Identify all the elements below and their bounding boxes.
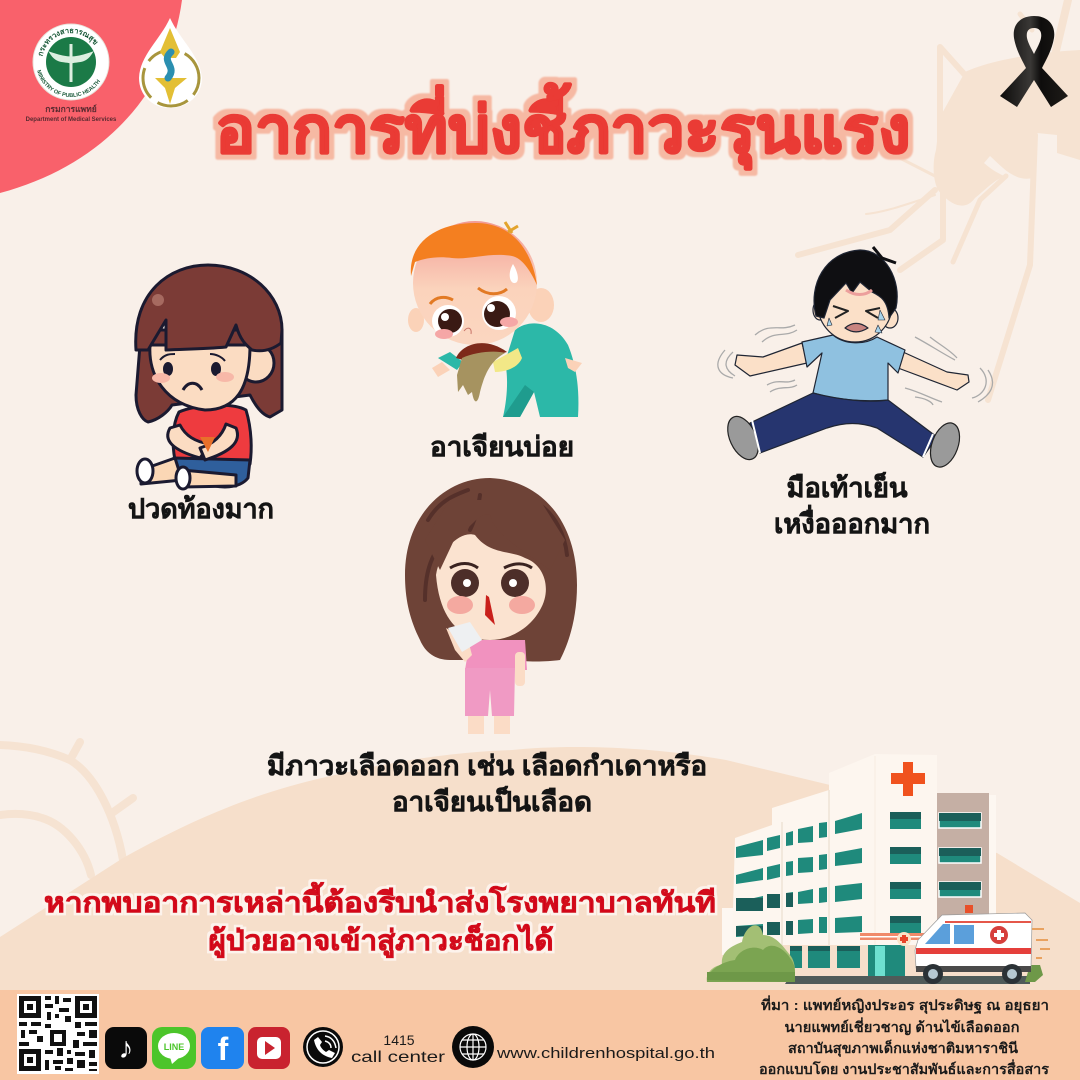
illustration: vomiting baby <box>408 221 582 417</box>
logo: child health institute <box>139 18 202 108</box>
label: bleeding symptoms: อาเจียนเป็นเลือด <box>392 784 592 817</box>
illustration: shaking boy <box>718 247 993 471</box>
illustration: woman with nosebleed <box>405 478 577 734</box>
title: อาการที่บ่งชี้ภาวะรุนแรง <box>216 83 910 170</box>
warning message: ผู้ป่วยอาจเข้าสู่ภาวะช็อกได้ <box>208 923 554 958</box>
source credits: ออกแบบโดย งานประชาสัมพันธ์และการสื่อสาร <box>759 1059 1049 1077</box>
top left red corner <box>0 0 182 193</box>
icon: phone <box>303 1027 343 1067</box>
black ribbon <box>1000 16 1068 107</box>
label: cold hands and feet, heavy sweating: เหงื่อออกมาก <box>774 504 930 539</box>
icon: youtube <box>248 1027 290 1069</box>
label: cold hands and feet, heavy sweating: มือเท้าเย็น <box>786 470 908 503</box>
logo: ministry of public health: กระทรวงสาธารณสุข <box>38 28 98 56</box>
footer bar <box>0 990 1080 1080</box>
label: cold hands and feet, heavy sweating <box>774 470 930 539</box>
source credits <box>759 995 1049 1077</box>
logo: ministry of public health <box>26 24 117 123</box>
warning message: หากพบอาการเหล่านี้ต้องรีบนำส่งโรงพยาบาลทันที <box>44 881 716 918</box>
icon: facebook <box>201 1027 244 1069</box>
logo: ministry of public health: Department of Medical Services <box>26 117 117 123</box>
icon: facebook: f <box>218 1031 229 1067</box>
illustration: girl with stomach ache <box>136 265 282 489</box>
mosquito silhouette top right <box>798 0 1080 400</box>
call center text: call center <box>351 1049 446 1066</box>
source credits: สถาบันสุขภาพเด็กแห่งชาติมหาราชินี <box>788 1039 1018 1057</box>
source credits: ที่มา : แพทย์หญิงประอร สุประดิษฐ ณ อยุธยา <box>761 995 1049 1015</box>
icon: line <box>152 1027 196 1069</box>
label: bleeding symptoms: มีภาวะเลือดออก เช่น เลือดกำเดาหรือ <box>267 751 707 781</box>
call center text: 1415 <box>383 1032 415 1048</box>
mosquito silhouette bottom left <box>0 742 133 875</box>
icon: tiktok: ♪ <box>118 1032 134 1065</box>
icon: globe <box>452 1026 494 1068</box>
source credits: นายแพทย์เชี่ยวชาญ ด้านไข้เลือดออก <box>784 1017 1020 1036</box>
call center text <box>351 1032 446 1066</box>
website url: www.childrenhospital.go.th <box>496 1045 715 1062</box>
label: frequent vomiting: อาเจียนบ่อย <box>430 432 574 462</box>
illustration: hospital and ambulance <box>707 754 1050 984</box>
logo: ministry of public health: MINISTRY OF PUBLIC HEALTH <box>37 70 100 97</box>
warning message <box>44 881 716 958</box>
icon: line: LINE <box>164 1042 184 1052</box>
label: bleeding symptoms <box>267 751 707 817</box>
label: severe abdominal pain: ปวดท้องมาก <box>128 494 274 524</box>
QR code <box>17 994 99 1074</box>
logo: ministry of public health: กรมการแพทย์ <box>45 104 97 114</box>
icon: tiktok <box>105 1027 147 1069</box>
hill background <box>0 747 1080 1000</box>
